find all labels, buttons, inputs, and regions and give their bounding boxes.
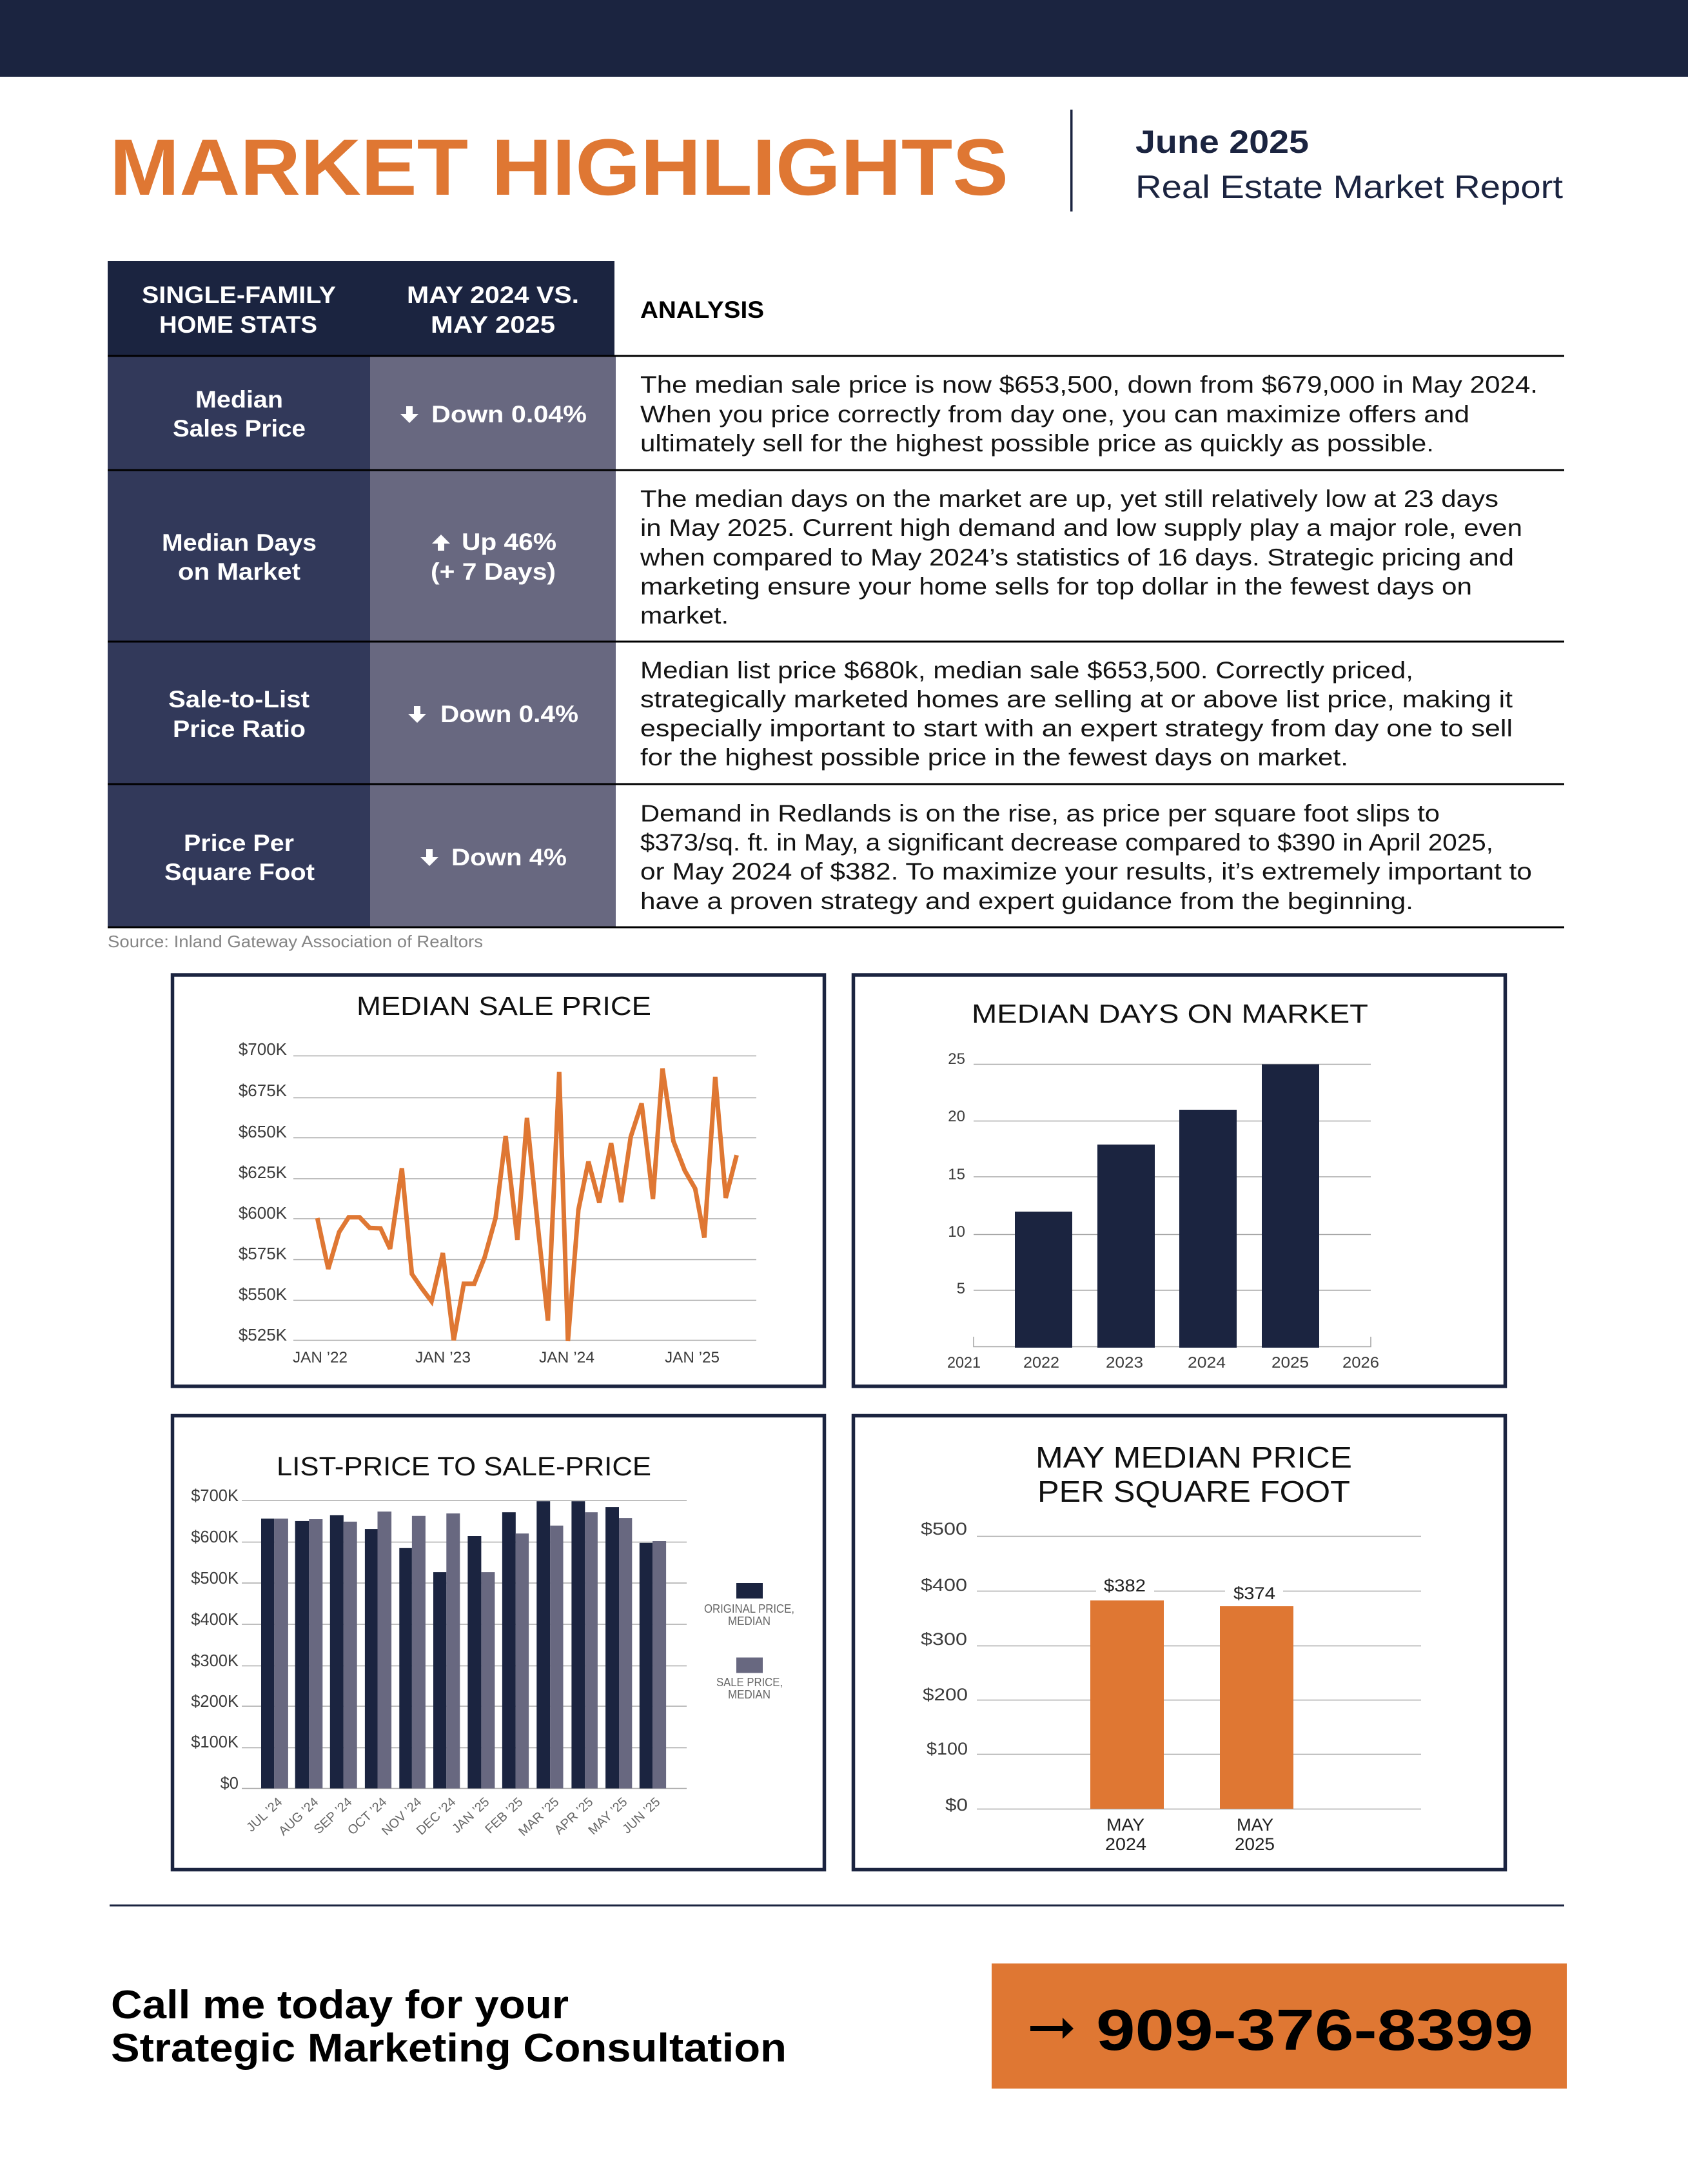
panel: median days on market bar chart: 2022 xyxy=(1023,1354,1059,1372)
panel: median sale price line chart: JAN ’24 xyxy=(539,1349,594,1366)
row: sale-to-list price ratio: especially important to start with an expert strategy from day one to sell xyxy=(640,715,1513,742)
panel: may median price per square foot bar chart: $374 xyxy=(1233,1584,1275,1603)
header divider xyxy=(1070,110,1073,212)
panel: may median price per square foot bar chart: 2025 xyxy=(1235,1835,1275,1854)
row: median days on market: on Market xyxy=(178,558,300,585)
row: median days on market: in May 2025. Current high demand and low supply play a major role, even xyxy=(640,515,1522,541)
panel: may median price per square foot bar chart: MAY MEDIAN PRICE xyxy=(1035,1441,1352,1474)
row: sale-to-list price ratio xyxy=(168,657,1513,771)
line series xyxy=(317,1068,736,1341)
panel: may median price per square foot bar chart: $300 xyxy=(921,1629,967,1649)
panel: may median price per square foot bar chart xyxy=(854,1416,1505,1870)
rotated month labels: JUL ’24 xyxy=(244,1795,285,1835)
rotated month labels: NOV ’24 xyxy=(379,1795,424,1838)
row: price per square foot xyxy=(164,800,1532,914)
rotated month labels: FEB ’25 xyxy=(482,1795,525,1836)
call to action text: Call me today for your xyxy=(111,1983,569,2027)
panel: list-price to sale-price bar chart: $700K xyxy=(191,1487,239,1505)
row: price per square foot: Price Per xyxy=(184,830,294,856)
panel: may median price per square foot bar chart: PER SQUARE FOOT xyxy=(1037,1475,1350,1508)
icon: down arrow xyxy=(420,849,438,866)
panel: list-price to sale-price bar chart: $200K xyxy=(191,1693,239,1711)
row: median sales price: The median sale price is now $653,500, down from $679,000 in May 2024. xyxy=(640,371,1538,398)
row: price per square foot: Demand in Redlands is on the rise, as price per square foot slips to xyxy=(640,800,1440,827)
panel: list-price to sale-price bar chart: $100K xyxy=(191,1733,239,1751)
row: median sales price: Down 0.04% xyxy=(431,401,587,428)
sale price bars xyxy=(274,1511,666,1789)
legend: MEDIAN xyxy=(728,1615,770,1628)
icon: down arrow xyxy=(408,706,426,723)
legend xyxy=(704,1583,794,1701)
panel: median days on market bar chart: 2025 xyxy=(1271,1354,1309,1372)
row: median days on market: market. xyxy=(640,602,729,629)
table header: SINGLE-FAMILY xyxy=(142,282,336,308)
panel: list-price to sale-price bar chart: $400K xyxy=(191,1611,239,1629)
phone call-out: 909-376-8399 xyxy=(1096,1998,1533,2063)
panel: list-price to sale-price bar chart: $500K xyxy=(191,1569,239,1588)
title: MARKET HIGHLIGHTS xyxy=(110,123,1008,212)
top banner xyxy=(0,0,1688,77)
panel: median sale price line chart: JAN ’22 xyxy=(293,1349,348,1366)
table header xyxy=(108,261,764,356)
row: sale-to-list price ratio: Price Ratio xyxy=(173,716,306,742)
panel: median days on market bar chart: 2021 xyxy=(947,1354,981,1372)
legend: ORIGINAL PRICE, xyxy=(704,1602,794,1615)
bars xyxy=(1015,1064,1319,1348)
panel: may median price per square foot bar chart: $400 xyxy=(921,1575,967,1595)
panel: median days on market bar chart: MEDIAN DAYS ON MARKET xyxy=(972,999,1368,1028)
row: price per square foot: $373/sq. ft. in May, a significant decrease compared to $390 in April 2025, xyxy=(640,829,1493,856)
panel: median sale price line chart xyxy=(173,975,824,1386)
row: sale-to-list price ratio: strategically marketed homes are selling at or above list price, making it xyxy=(640,686,1513,713)
call to action text xyxy=(111,1983,787,2071)
row rules xyxy=(108,355,1564,929)
panel: median days on market bar chart xyxy=(854,975,1505,1386)
panel: median sale price line chart: $700K xyxy=(239,1039,288,1059)
source note: Source: Inland Gateway Association of Realtors xyxy=(108,932,483,951)
panel: median sale price line chart: $625K xyxy=(239,1163,288,1182)
rotated month labels: SEP ’24 xyxy=(311,1795,355,1837)
stat column backgrounds xyxy=(108,356,616,927)
table header: MAY 2024 VS. xyxy=(407,282,579,308)
phone call-out xyxy=(992,1963,1567,2089)
panel: median days on market bar chart: 20 xyxy=(948,1108,965,1125)
table header: HOME STATS xyxy=(159,311,317,338)
panel: may median price per square foot bar chart: $100 xyxy=(927,1739,968,1758)
rotated month labels: DEC ’24 xyxy=(414,1795,458,1838)
row: sale-to-list price ratio: Sale-to-List xyxy=(168,686,309,713)
panel: median sale price line chart: $650K xyxy=(239,1122,288,1141)
stats table xyxy=(108,261,1564,929)
row: sale-to-list price ratio: Median list price $680k, median sale $653,500. Correctly priced, xyxy=(640,657,1413,684)
panel: may median price per square foot bar chart: $382 xyxy=(1104,1576,1146,1595)
icon: arrow xyxy=(1030,2018,1074,2039)
row: median sales price xyxy=(173,371,1538,457)
row: price per square foot: Square Foot xyxy=(164,859,315,885)
panel: list-price to sale-price bar chart xyxy=(173,1416,824,1870)
row: median days on market: marketing ensure your home sells for top dollar in the fewest days on xyxy=(640,573,1472,600)
panel: median sale price line chart: MEDIAN SALE PRICE xyxy=(357,991,651,1021)
row: median days on market xyxy=(162,486,1522,629)
row: price per square foot: Down 4% xyxy=(451,844,567,871)
panel: may median price per square foot bar chart: MAY xyxy=(1106,1815,1144,1835)
row: price per square foot: or May 2024 of $382. To maximize your results, it’s extremely important to xyxy=(640,858,1532,885)
rotated month labels: JAN ’25 xyxy=(449,1795,492,1836)
row: median days on market: The median days on the market are up, yet still relatively low at 23 days xyxy=(640,486,1498,512)
panel: may median price per square foot bar chart: $0 xyxy=(945,1795,968,1815)
report date and name: Real Estate Market Report xyxy=(1135,169,1563,205)
panel: median sale price line chart: $600K xyxy=(239,1203,288,1223)
panel: list-price to sale-price bar chart: $0 xyxy=(221,1775,239,1793)
panel: median days on market bar chart: 2024 xyxy=(1188,1354,1226,1372)
panel: median days on market bar chart: 15 xyxy=(948,1166,965,1183)
panel: list-price to sale-price bar chart: $300K xyxy=(191,1652,239,1670)
panel: may median price per square foot bar chart: MAY xyxy=(1237,1815,1273,1835)
table header: MAY 2025 xyxy=(431,311,555,338)
call to action text: Strategic Marketing Consultation xyxy=(111,2026,787,2071)
icon: up arrow xyxy=(432,535,450,551)
panel: median sale price line chart: $575K xyxy=(239,1244,288,1263)
panel: may median price per square foot bar chart: 2024 xyxy=(1105,1835,1146,1854)
rotated month labels: OCT ’24 xyxy=(345,1795,389,1838)
panel: median days on market bar chart: 2026 xyxy=(1342,1354,1379,1372)
report date and name xyxy=(1135,124,1563,205)
legend: MEDIAN xyxy=(728,1688,770,1701)
panel: list-price to sale-price bar chart: LIST-PRICE TO SALE-PRICE xyxy=(277,1451,651,1481)
row: sale-to-list price ratio: for the highest possible price in the fewest days on market. xyxy=(640,744,1348,771)
row: median sales price: ultimately sell for the highest possible price as quickly as possible. xyxy=(640,430,1434,457)
bars xyxy=(1090,1600,1293,1809)
row: median sales price: When you price correctly from day one, you can maximize offers and xyxy=(640,401,1469,428)
row: price per square foot: have a proven strategy and expert guidance from the beginning. xyxy=(640,888,1413,914)
row: median days on market: Up 46% xyxy=(462,529,556,555)
rotated month labels: MAY ’25 xyxy=(585,1795,630,1838)
row: sale-to-list price ratio: Down 0.4% xyxy=(440,701,578,727)
row: median sales price: Median xyxy=(195,386,283,413)
panel: may median price per square foot bar chart: $500 xyxy=(921,1519,967,1539)
rotated month labels: MAR ’25 xyxy=(516,1795,562,1839)
row: median days on market: Median Days xyxy=(162,529,317,556)
panel: median sale price line chart: JAN ’25 xyxy=(665,1349,720,1366)
panel: list-price to sale-price bar chart: $600K xyxy=(191,1528,239,1546)
rotated month labels: AUG ’24 xyxy=(276,1795,321,1838)
row: median sales price: Sales Price xyxy=(173,415,306,442)
table header: ANALYSIS xyxy=(640,297,764,323)
row: median days on market: (+ 7 Days) xyxy=(431,558,556,585)
panel: median days on market bar chart: 10 xyxy=(948,1223,965,1241)
row: median days on market: when compared to May 2024’s statistics of 16 days. Strategic pricing and xyxy=(640,544,1514,571)
panel: may median price per square foot bar chart: $200 xyxy=(923,1685,968,1704)
rotated month labels: JUN ’25 xyxy=(620,1795,663,1836)
report date and name: June 2025 xyxy=(1135,124,1309,160)
panel: median sale price line chart: $675K xyxy=(239,1081,288,1100)
panel: median days on market bar chart: 25 xyxy=(948,1050,965,1068)
rotated month labels xyxy=(244,1795,663,1839)
panel: median sale price line chart: JAN ’23 xyxy=(415,1349,471,1366)
icon: down arrow xyxy=(400,406,418,423)
panel: median sale price line chart: $525K xyxy=(239,1325,288,1344)
original price bars xyxy=(261,1501,653,1789)
rotated month labels: APR ’25 xyxy=(552,1795,596,1838)
panel: median days on market bar chart: 5 xyxy=(957,1280,965,1297)
legend: SALE PRICE, xyxy=(716,1676,783,1689)
panel: median days on market bar chart: 2023 xyxy=(1106,1354,1143,1372)
panel: median sale price line chart: $550K xyxy=(239,1284,288,1304)
footer rule xyxy=(110,1905,1564,1906)
